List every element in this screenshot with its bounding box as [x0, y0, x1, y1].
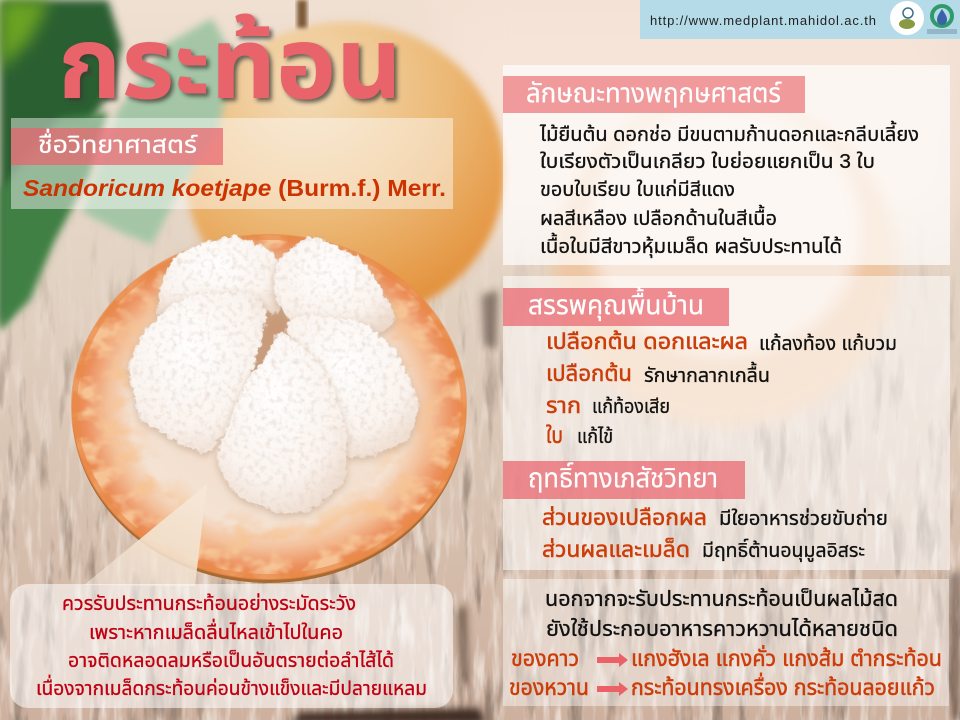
photo: whole yellow fruit: [185, 0, 505, 322]
heading: botanical characteristics: ลักษณะทางพฤกษศาสตร์: [526, 78, 782, 108]
folk uses list: [546, 329, 897, 448]
caution text: ควรรับประทานกระท้อนอย่างระมัดระวัง: [62, 592, 356, 615]
flesh lobe: top right: [273, 235, 397, 335]
culinary intro text: ยังใช้ประกอบอาหารคาวหวานได้หลายชนิด: [546, 617, 898, 641]
folk uses list: แก้ไข้: [577, 425, 613, 448]
callout: caution when eating: [10, 484, 453, 708]
folk uses list: ราก: [546, 393, 581, 418]
savory dishes row: ของคาว: [511, 646, 579, 671]
panel: folk uses and pharmacology: [503, 276, 950, 570]
pharmacology list: ส่วนของเปลือกผล: [542, 505, 707, 530]
heading: scientific name: [11, 128, 223, 165]
heading: folk uses: [503, 286, 729, 326]
logo: green wreath: [927, 6, 957, 34]
botanical description: เนื้อในมีสีขาวหุ้มเมล็ด ผลรับประทานได้: [540, 232, 842, 258]
caution text: [36, 592, 427, 700]
culinary intro text: นอกจากจะรับประทานกระท้อนเป็นผลไม้สด: [545, 587, 898, 611]
caution text: อาจติดหลอดลมหรือเป็นอันตรายต่อลำไส้ได้: [68, 649, 394, 672]
pharmacology list: [542, 505, 888, 563]
title: กระท้อน: [58, 8, 402, 120]
photo: green leaves: [0, 0, 235, 330]
folk uses list: เปลือกต้น ดอกและผล: [546, 329, 748, 354]
panel: culinary uses: [503, 579, 949, 706]
flesh lobe: top left: [157, 235, 283, 320]
folk uses list: รักษากลากเกลื้น: [644, 361, 770, 387]
photo: blurred cut fruit: [553, 97, 897, 427]
scientific name text: Sandoricum koetjape (Burm.f.) Merr.: [23, 175, 446, 201]
heading: folk uses: สรรพคุณพื้นบ้าน: [528, 286, 704, 321]
sweet dishes row: ของหวาน: [509, 675, 589, 700]
savory dishes row: แกงฮังเล แกงคั่ว แกงส้ม ตำกระท้อน: [631, 644, 942, 671]
folk uses list: ใบ: [546, 423, 563, 448]
folk uses list: เปลือกต้น: [546, 361, 632, 386]
botanical description: ใบเรียงตัวเป็นเกลียว ใบย่อยแยกเป็น 3 ใบ: [540, 150, 875, 173]
botanical description: ไม้ยืนต้น ดอกช่อ มีขนตามก้านดอกและกลีบเลี้ยง: [539, 120, 919, 146]
pharmacology list: ส่วนผลและเมล็ด: [542, 537, 690, 562]
caution text: เนื่องจากเมล็ดกระท้อนค่อนข้างแข็งและมีปลายแหลม: [36, 674, 427, 700]
arrow: sweet: [597, 682, 628, 696]
botanical description: ผลสีเหลือง เปลือกด้านในสีเนื้อ: [540, 204, 777, 230]
flesh lobe: left: [128, 292, 267, 455]
panel: botanical characteristics: [503, 65, 950, 265]
botanical description: [539, 120, 919, 258]
botanical description: ขอบใบเรียบ ใบแก่มีสีแดง: [540, 178, 735, 201]
heading: pharmacology: [503, 461, 745, 499]
culinary intro text: [545, 587, 898, 641]
folk uses list: แก้ลงท้อง แก้บวม: [759, 332, 897, 355]
caution text: เพราะหากเมล็ดลื่นไหลเข้าไปในคอ: [89, 618, 343, 644]
folk uses list: แก้ท้องเสีย: [592, 395, 670, 418]
panel: scientific name: [11, 118, 453, 209]
heading: scientific name: ชื่อวิทยาศาสตร์: [38, 128, 198, 159]
website url: http://www.medplant.mahidol.ac.th: [650, 13, 876, 28]
heading: pharmacology: ฤทธิ์ทางเภสัชวิทยา: [528, 463, 718, 493]
flesh lobe: bottom: [215, 328, 347, 513]
photo: halved santol fruit: [72, 235, 466, 583]
pharmacology list: มีฤทธิ์ต้านอนุมูลอิสระ: [702, 538, 865, 563]
arrow: savory: [597, 653, 628, 667]
sweet dishes row: กระท้อนทรงเครื่อง กระท้อนลอยแก้ว: [631, 672, 935, 700]
flesh lobe: right: [283, 315, 420, 457]
logo: medicinal plant: [890, 1, 924, 35]
sweet dishes row: [509, 672, 935, 700]
pharmacology list: มีใยอาหารช่วยขับถ่าย: [719, 507, 888, 530]
savory dishes row: [511, 644, 942, 671]
website bar: [640, 0, 960, 39]
